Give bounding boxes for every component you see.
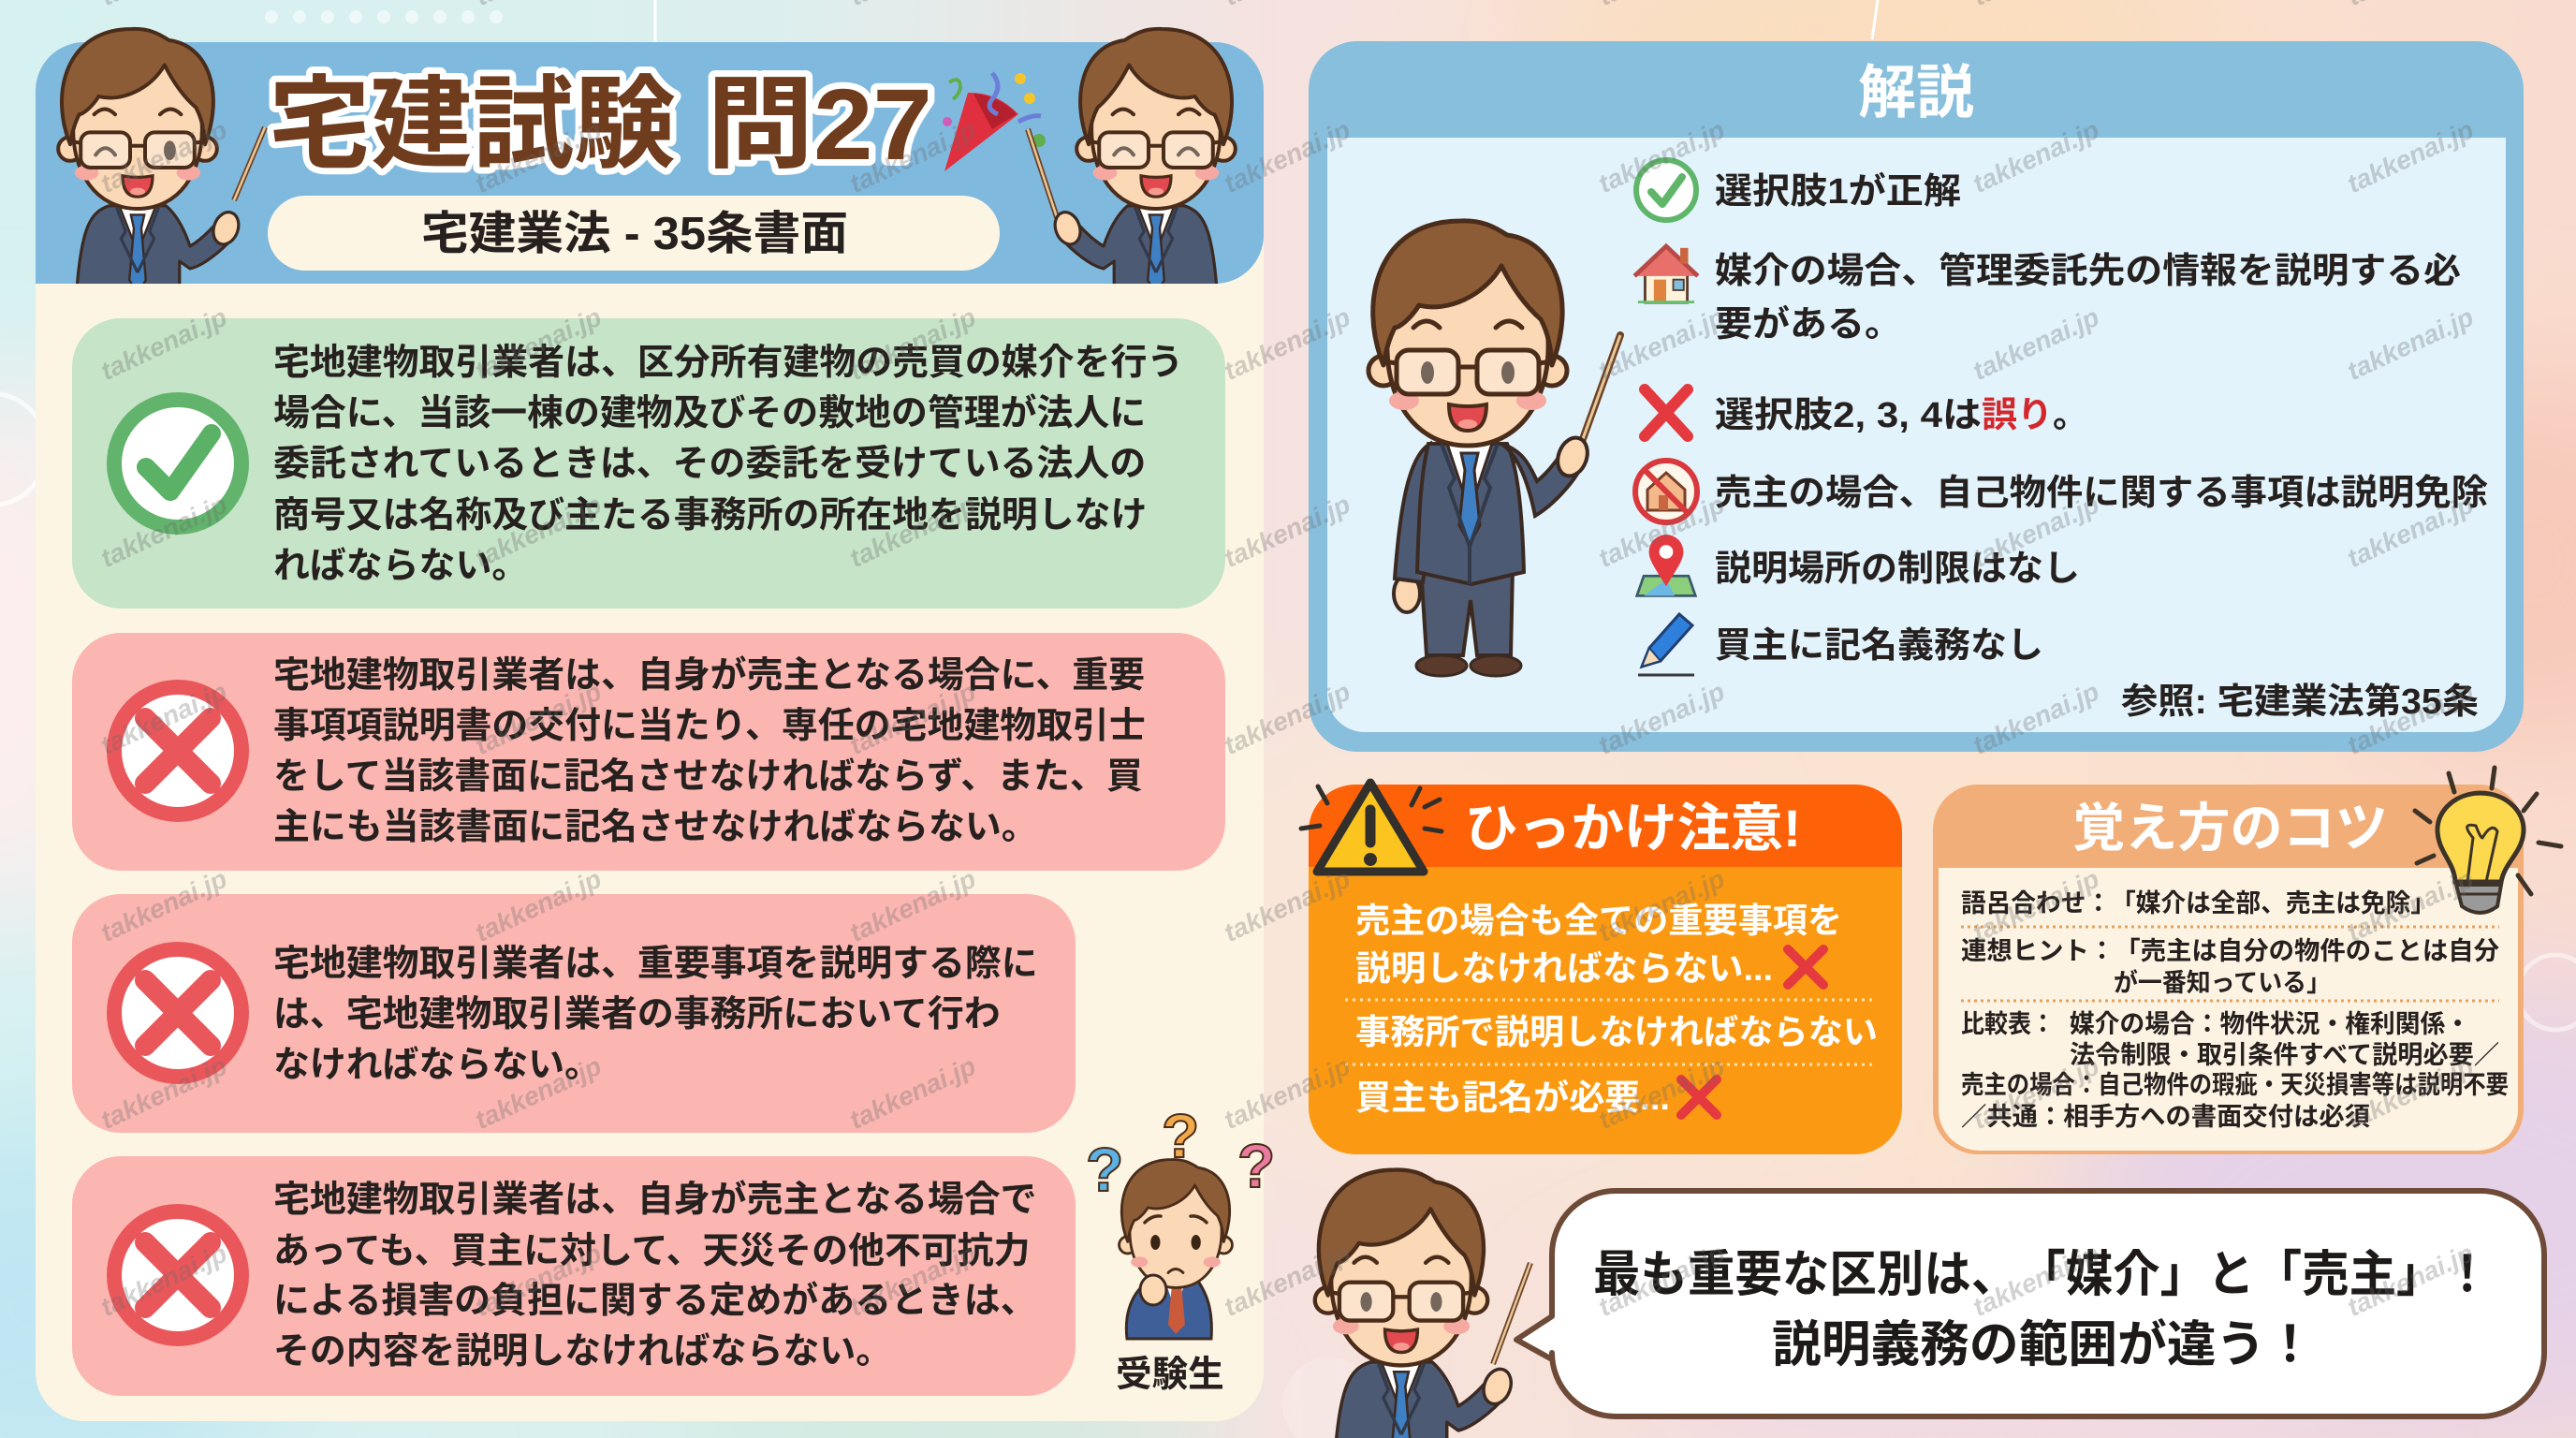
watermarks: takkenai.jp: [1594, 677, 1729, 760]
watermarks: takkenai.jp: [96, 302, 231, 386]
watermarks: takkenai.jp: [1220, 1239, 1354, 1322]
panel: question choices: [36, 29, 1275, 1421]
left teacher: [58, 29, 265, 299]
watermarks: takkenai.jp: [471, 864, 606, 947]
watermarks: takkenai.jp: [845, 490, 980, 573]
question marks: ?: [1162, 1101, 1199, 1170]
watermarks: takkenai.jp: [96, 490, 231, 573]
row: brokerage: 媒介の場合、管理委託先の情報を説明する必: [1715, 252, 2461, 291]
text: その内容を説明しなければならない。: [273, 1331, 892, 1372]
icon: cross: [114, 1211, 242, 1339]
student label: 受験生: [1116, 1355, 1224, 1395]
text: [273, 343, 1183, 586]
speech bubble: [1516, 1191, 2544, 1416]
warning text: 説明しなければならない...: [1355, 949, 1773, 988]
row: seller: [1635, 461, 2488, 522]
choice 1: correct: [72, 318, 1225, 609]
row: correct answer: [1636, 160, 1961, 220]
header band: [36, 29, 1264, 299]
teacher character: [1368, 221, 1620, 676]
watermarks: takkenai.jp: [1594, 1051, 1729, 1135]
watermarks: takkenai.jp: [845, 115, 980, 198]
watermarks: takkenai.jp: [2343, 490, 2478, 573]
subtitle pill: [268, 196, 1000, 271]
row: wrong answers: [1645, 389, 2088, 436]
watermarks: takkenai.jp: [2343, 1051, 2478, 1135]
tips text: 連想ヒント：「売主は自分の物件のことは自分: [1961, 937, 2499, 965]
watermarks: takkenai.jp: [2343, 115, 2478, 198]
text: 委託されているときは、その委託を受けている法人の: [273, 444, 1146, 484]
text: [273, 655, 1146, 847]
row: correct answer: 選択肢1が正解: [1715, 172, 1961, 212]
watermarks: takkenai.jp: [1220, 302, 1354, 386]
heading: ひっかけ注意!: [1465, 799, 1801, 858]
text: ればならない。: [273, 546, 528, 586]
reference note: 参照: 宅建業法第35条: [2121, 682, 2479, 722]
text: [273, 944, 1038, 1085]
watermarks: takkenai.jp: [96, 864, 231, 947]
watermarks: takkenai.jp: [1969, 302, 2103, 386]
text: による損害の負担に関する定めがあるときは、: [273, 1281, 1037, 1321]
row: location: [1637, 535, 2080, 595]
watermarks: takkenai.jp: [2343, 864, 2478, 947]
watermarks: takkenai.jp: [1220, 864, 1354, 947]
watermarks: takkenai.jp: [2343, 1239, 2478, 1322]
watermarks: takkenai.jp: [1594, 115, 1729, 198]
tips text: が一番知っている」: [2114, 968, 2331, 997]
choice 3: wrong: [72, 894, 1076, 1133]
icon: pen: [1638, 614, 1694, 675]
panel: memory tips: [1933, 768, 2561, 1154]
bubble text: 最も重要な区別は、「媒介」と「売主」！: [1593, 1247, 2491, 1302]
text: [273, 1180, 1037, 1372]
row: wrong answers: 誤り: [1982, 396, 2053, 435]
watermarks: takkenai.jp: [1969, 864, 2103, 947]
title: [269, 67, 932, 181]
watermarks: takkenai.jp: [1594, 490, 1729, 573]
watermarks: takkenai.jp: [1220, 677, 1354, 760]
title: 問27: [707, 67, 932, 181]
row: seller: 売主の場合、自己物件に関する事項は説明免除: [1715, 474, 2488, 513]
text: 宅地建物取引業者は、重要事項を説明する際に: [273, 944, 1038, 984]
icon: cross: [114, 949, 242, 1077]
tips text: 媒介の場合：物件状況・権利関係・: [2070, 1010, 2470, 1038]
subtitle pill: 宅建業法 - 35条書面: [421, 209, 848, 259]
watermarks: takkenai.jp: [1969, 115, 2103, 198]
icon: cross: [114, 687, 242, 814]
watermarks: takkenai.jp: [1969, 1051, 2103, 1135]
icon: cross: [1645, 389, 1688, 436]
row: buyer signature: 買主に記名義務なし: [1715, 626, 2043, 666]
text: 主にも当該書面に記名させなければならない。: [273, 807, 1038, 847]
icon: check: [114, 400, 242, 527]
warning text: 売主の場合も全ての重要事項を: [1355, 902, 1842, 940]
watermarks: takkenai.jp: [1969, 677, 2103, 760]
watermarks: takkenai.jp: [96, 1051, 231, 1135]
watermarks: takkenai.jp: [2343, 677, 2478, 760]
watermarks: takkenai.jp: [845, 302, 980, 386]
watermarks: takkenai.jp: [1220, 490, 1354, 573]
watermarks: takkenai.jp: [1594, 864, 1729, 947]
watermarks: takkenai.jp: [1969, 490, 2103, 573]
text: は、宅地建物取引業者の事務所において行わ: [273, 994, 1001, 1034]
question marks: ?: [1237, 1131, 1275, 1200]
row: brokerage: 要がある。: [1715, 305, 1902, 345]
watermarks: takkenai.jp: [1220, 1051, 1354, 1135]
watermarks: takkenai.jp: [1969, 1239, 2103, 1322]
text: 宅地建物取引業者は、自身が売主となる場合で: [273, 1180, 1037, 1220]
row: brokerage: [1634, 246, 2461, 345]
text: 宅地建物取引業者は、自身が売主となる場合に、重要: [273, 655, 1145, 696]
watermarks: takkenai.jp: [845, 1051, 980, 1135]
row: wrong answers: 。: [2053, 396, 2088, 435]
text: をして当該書面に記名させなければならず、また、買: [273, 756, 1143, 797]
watermarks: takkenai.jp: [471, 115, 606, 198]
watermarks: takkenai.jp: [845, 864, 980, 947]
watermarks: takkenai.jp: [845, 1239, 980, 1322]
bubble text: 説明義務の範囲が違う！: [1772, 1317, 2315, 1372]
watermarks: takkenai.jp: [471, 1051, 606, 1135]
row: location: 説明場所の制限はなし: [1715, 550, 2080, 589]
watermarks: takkenai.jp: [845, 677, 980, 760]
watermarks: takkenai.jp: [96, 677, 231, 760]
watermarks: takkenai.jp: [471, 490, 606, 573]
panel: trap warning: [1301, 783, 1902, 1154]
text: あっても、買主に対して、天災その他不可抗力: [273, 1231, 1031, 1271]
tips text: 売主の場合：自己物件の瑕疵・天災損害等は説明不要: [1961, 1071, 2509, 1099]
tips text: 法令制限・取引条件すべて説明必要／: [2070, 1041, 2499, 1069]
right teacher: [1028, 29, 1236, 299]
text: 場合に、当該一棟の建物及びその敷地の管理が法人に: [273, 393, 1146, 433]
watermarks: takkenai.jp: [2343, 302, 2478, 386]
warning text: 事務所で説明しなければならない: [1355, 1013, 1878, 1051]
icon: party popper: [943, 73, 1046, 171]
question marks: [1086, 1101, 1275, 1204]
warning text: [1345, 902, 1878, 1117]
icon: light bulb: [2415, 768, 2561, 913]
watermarks: takkenai.jp: [471, 1239, 606, 1322]
icon: no house: [1635, 461, 1697, 522]
text: 商号又は名称及び主たる事務所の所在地を説明しなけ: [273, 495, 1147, 536]
bubble text: [1593, 1247, 2491, 1372]
bottom teacher: [1315, 1170, 1530, 1438]
row: buyer signature: [1638, 614, 2043, 675]
icon: check: [1636, 160, 1696, 220]
row: wrong answers: 選択肢2, 3, 4は: [1715, 396, 1982, 435]
watermarks: takkenai.jp: [1594, 302, 1729, 386]
heading: 解説: [1858, 61, 1974, 125]
choice 4: wrong: [72, 1156, 1076, 1396]
tips text: ／共通：相手方への書面交付は必須: [1961, 1103, 2370, 1131]
watermarks: takkenai.jp: [96, 115, 231, 198]
text: 宅地建物取引業者は、区分所有建物の売買の媒介を行う: [273, 343, 1183, 383]
choice 2: wrong: [72, 633, 1225, 871]
watermarks: takkenai.jp: [1594, 1239, 1729, 1322]
tips text: 比較表：: [1961, 1010, 2055, 1038]
watermarks: takkenai.jp: [96, 1239, 231, 1322]
watermarks: takkenai.jp: [1220, 115, 1354, 198]
tips text: 語呂合わせ：「媒介は全部、売主は免除」: [1961, 889, 2436, 917]
watermarks: takkenai.jp: [471, 677, 606, 760]
text: 事項項説明書の交付に当たり、専任の宅地建物取引士: [273, 706, 1146, 746]
tips text: [1961, 889, 2509, 1131]
student character: [1086, 1101, 1275, 1395]
question marks: ?: [1086, 1135, 1123, 1204]
icon: map pin: [1637, 535, 1695, 595]
text: なければならない。: [273, 1045, 601, 1085]
heading: 覚え方のコツ: [2072, 799, 2388, 858]
watermarks: takkenai.jp: [471, 302, 606, 386]
warning text: 買主も記名が必要...: [1355, 1078, 1670, 1117]
icon: house: [1634, 246, 1698, 303]
icon: warning triangle: [1301, 783, 1442, 872]
title: 宅建試験: [269, 67, 676, 181]
panel: explanation: [1309, 41, 2524, 752]
